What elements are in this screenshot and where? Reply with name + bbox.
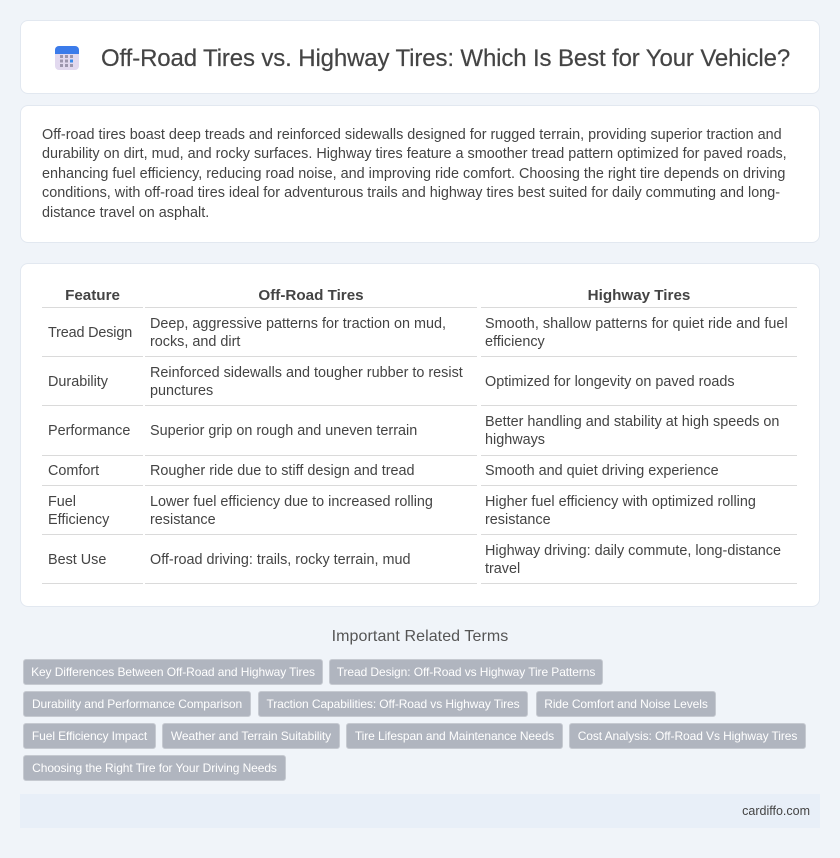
- intro text: durability on dirt, mud, and rocky surfaces. Highway tires feature a smoother tread pattern optimized for paved roads,: [42, 146, 787, 162]
- row: best use: Best Use: [48, 552, 106, 568]
- comparison table: rocks, and dirt: [150, 334, 240, 350]
- comparison table: Off-Road Tires: [258, 287, 364, 304]
- intro text: distance travel on asphalt.: [42, 204, 209, 220]
- related term tags: Weather and Terrain Suitability: [171, 729, 331, 743]
- intro panel: [20, 105, 820, 243]
- comparison table: Highway Tires: [588, 287, 690, 304]
- header panel: [20, 20, 820, 94]
- row: comfort: Comfort: [48, 463, 99, 479]
- comparison table: Smooth, shallow patterns for quiet ride and fuel: [485, 316, 788, 332]
- comparison table: Smooth and quiet driving experience: [485, 463, 719, 479]
- comparison table: Better handling and stability at high speeds on: [485, 414, 779, 430]
- related term tags: Tire Lifespan and Maintenance Needs: [355, 729, 554, 743]
- comparison table: Efficiency: [48, 512, 109, 528]
- comparison table: resistance: [485, 512, 551, 528]
- comparison table: [42, 287, 797, 584]
- title: Off-Road Tires vs. Highway Tires: Which Is Best for Your Vehicle?: [101, 45, 790, 72]
- icon: calendar: [55, 46, 79, 70]
- row: performance: Performance: [48, 423, 130, 439]
- row: durability: Durability: [48, 374, 108, 390]
- comparison table: Reinforced sidewalls and tougher rubber to resist: [150, 365, 463, 381]
- comparison table: Lower fuel efficiency due to increased rolling: [150, 494, 433, 510]
- related term tags: [23, 659, 806, 781]
- comparison table: Higher fuel efficiency with optimized rolling: [485, 494, 756, 510]
- related term tags: Durability and Performance Comparison: [32, 697, 242, 711]
- related term tags: Traction Capabilities: Off-Road vs Highway Tires: [266, 697, 520, 711]
- table header: Feature: [65, 287, 120, 304]
- comparison table: Rougher ride due to stiff design and tread: [150, 463, 415, 479]
- intro text: enhancing fuel efficiency, reducing road noise, and improving ride comfort. Choosing the right tire depends on driving: [42, 166, 785, 182]
- intro text: conditions, with off-road tires ideal for adventurous trails and highway tires best suited for daily commuting and long-: [42, 185, 780, 201]
- comparison table: Superior grip on rough and uneven terrain: [150, 423, 417, 439]
- comparison table: resistance: [150, 512, 216, 528]
- related term tags: Tread Design: Off-Road vs Highway Tire Patterns: [337, 665, 595, 679]
- comparison table: punctures: [150, 383, 213, 399]
- footer bar: [20, 794, 820, 828]
- comparison table: Deep, aggressive patterns for traction on mud,: [150, 316, 446, 332]
- comparison table: Optimized for longevity on paved roads: [485, 374, 735, 390]
- comparison table: Off-road driving: trails, rocky terrain, mud: [150, 552, 410, 568]
- footer source: cardiffo.com: [742, 804, 810, 818]
- comparison table: efficiency: [485, 334, 545, 350]
- intro text: Off-road tires boast deep treads and reinforced sidewalls designed for rugged terrain, providing superior traction and: [42, 126, 782, 142]
- related term tags: Ride Comfort and Noise Levels: [544, 697, 708, 711]
- related term tags: Choosing the Right Tire for Your Driving Needs: [32, 761, 277, 775]
- row: tread design: Tread Design: [48, 325, 132, 341]
- comparison table: highways: [485, 432, 545, 448]
- related term tags: Fuel Efficiency Impact: [32, 729, 147, 743]
- comparison table: Highway driving: daily commute, long-distance: [485, 543, 781, 559]
- row: fuel efficiency: Fuel: [48, 494, 76, 510]
- related terms heading: Important Related Terms: [332, 628, 508, 645]
- related term tags: Key Differences Between Off-Road and Highway Tires: [31, 665, 315, 679]
- comparison table: travel: [485, 561, 520, 577]
- comparison table panel: [20, 263, 820, 607]
- intro text: [42, 126, 787, 220]
- related term tags: Cost Analysis: Off-Road Vs Highway Tires: [578, 729, 797, 743]
